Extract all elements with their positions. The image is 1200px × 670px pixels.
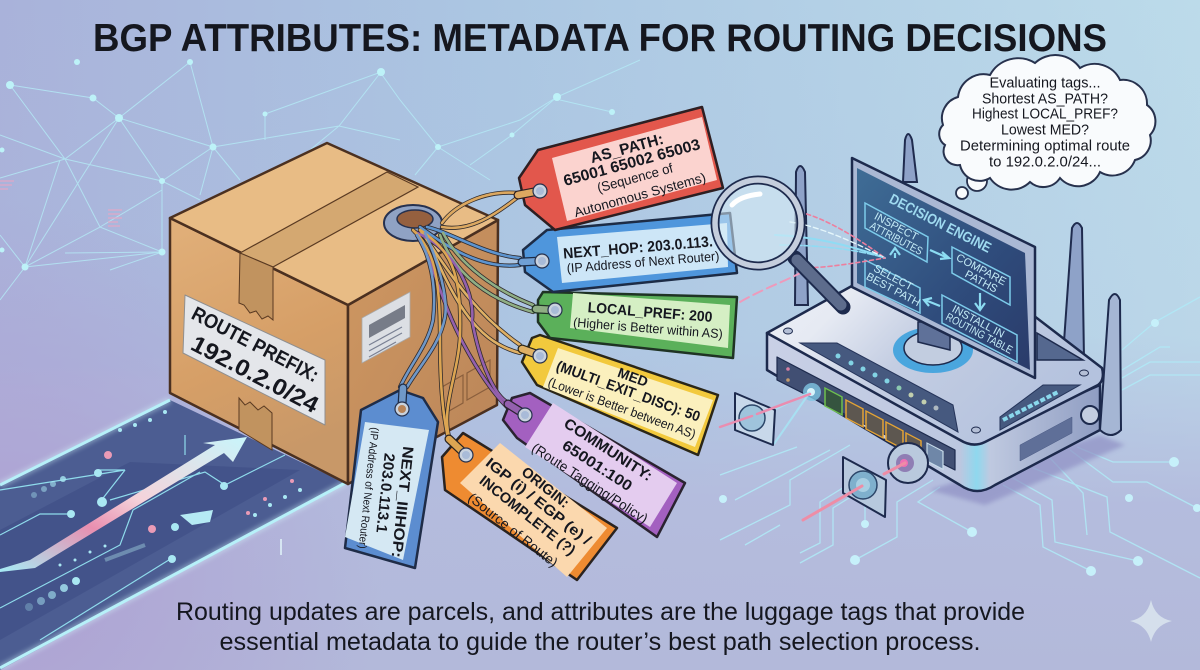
tag: as path: 65001 65002 65003 (562, 136, 703, 190)
step: install in routing table: ROUTING TABLE (944, 311, 1014, 357)
tag: as path: AS_PATH: (588, 131, 666, 167)
sparkle watermark (1130, 600, 1172, 642)
tag: local pref: (Higher is Better within AS) (573, 315, 723, 341)
box top face (170, 143, 498, 305)
thought text: Lowest MED? (1001, 122, 1089, 138)
router top (767, 240, 1103, 445)
box left face (170, 218, 348, 484)
handling icons (442, 360, 490, 415)
step: select best path: SELECT (871, 263, 915, 293)
laser lens block: left (735, 393, 775, 445)
tag: origin (442, 433, 617, 580)
tag: med: (MULTI_EXIT_DISC): 50 (554, 358, 702, 426)
tag: left next hop (345, 388, 438, 568)
data highway with arrow (0, 400, 345, 670)
screws (784, 328, 1088, 433)
tag: origin: IGP (i) / EGP (e) / (482, 455, 594, 549)
cardboard box (170, 143, 498, 484)
caption: essential metadata to guide the router’s best path selection process. (220, 628, 981, 656)
tag: local pref: LOCAL_PREF: 200 (587, 300, 713, 326)
tag: med: MED (616, 364, 650, 390)
tag grommet (384, 205, 442, 241)
tag: as path: Autonomous Systems) (572, 170, 708, 220)
circuit traces (719, 297, 1200, 578)
tag: community: COMMUNITY: (561, 415, 655, 485)
network mesh background (0, 59, 640, 300)
tag: as path: (Sequence of (595, 160, 675, 196)
front antenna (1081, 294, 1121, 435)
tag: community: 65001:100 (559, 437, 635, 495)
tag: as path (518, 107, 723, 230)
tag: community: (Route Tagging/Policy) (529, 440, 651, 526)
back antennas (795, 134, 1084, 360)
step: inspect attributes (865, 203, 928, 262)
thought text: Highest LOCAL_PREF? (972, 106, 1118, 122)
tag: next hop (522, 213, 737, 292)
right laser emitter knob (888, 443, 928, 483)
thought text: Evaluating tags... (990, 74, 1100, 92)
tag: left next hop: 203.0.113.1 (372, 452, 398, 534)
step: compare paths: PATHS (963, 268, 999, 296)
side grille (1020, 417, 1072, 461)
status led strip (800, 343, 958, 432)
title: BGP ATTRIBUTES: METADATA FOR ROUTING DECISIONS (93, 17, 1107, 60)
router body (767, 333, 1100, 491)
port panel (777, 357, 955, 470)
tag: next hop: (IP Address of Next Router) (566, 248, 720, 276)
left laser emitter (774, 383, 821, 444)
step: compare paths: COMPARE (954, 252, 1008, 288)
step: select best path: BEST PATH (864, 271, 922, 309)
tag: left next hop: (IP Address of Next Router) (356, 427, 380, 549)
step: compare paths (952, 247, 1010, 305)
route prefix label: 192.0.2.0/24 (187, 330, 323, 418)
tag: origin: (Source of Route) (465, 490, 561, 570)
step: inspect attributes: INSPECT (872, 211, 920, 244)
magnifying glass (715, 180, 843, 307)
rear panel behind screen (1037, 333, 1083, 360)
decision engine screen (852, 158, 1035, 378)
caption: Routing updates are parcels, and attributes are the luggage tags that provide (176, 598, 1025, 626)
thought text: Determining optimal route (960, 138, 1130, 154)
laser lens block: right (843, 457, 886, 517)
tag: origin: INCOMPLETE (?) (476, 473, 578, 559)
tag: med: (Lower is Better between AS) (546, 374, 698, 442)
tag strings (400, 193, 533, 440)
decision engine screen: DECISION ENGINE (886, 191, 994, 257)
thought text (960, 74, 1130, 170)
route prefix label (183, 295, 325, 425)
thought text: Shortest AS_PATH? (982, 90, 1108, 108)
laser beams (720, 394, 905, 520)
step: install in routing table: INSTALL IN (950, 303, 1006, 341)
box right face (348, 220, 498, 484)
flow arrows (890, 248, 985, 310)
thought text: to 192.0.2.0/24... (989, 154, 1101, 170)
tag: med (522, 335, 718, 455)
router (767, 134, 1125, 505)
tag: community (503, 393, 685, 537)
barcode sticker (362, 292, 410, 363)
step: install in routing table (942, 295, 1017, 362)
route prefix label: ROUTE PREFIX: (188, 303, 322, 387)
right vent panel (1000, 385, 1080, 430)
step: inspect attributes: ATTRIBUTES (868, 220, 924, 258)
tag: left next hop: NEXT_IIIHOP: (388, 445, 416, 559)
tag: local pref (536, 292, 737, 358)
inspection rays (740, 212, 885, 302)
caption (176, 598, 1025, 656)
packing tape (239, 172, 418, 450)
router shadow (930, 435, 1125, 505)
thought bubble (939, 55, 1155, 199)
tag: origin: ORIGIN: (518, 464, 572, 512)
tag: next hop: NEXT_HOP: 203.0.113. (563, 233, 713, 263)
monitor stand (893, 322, 973, 373)
